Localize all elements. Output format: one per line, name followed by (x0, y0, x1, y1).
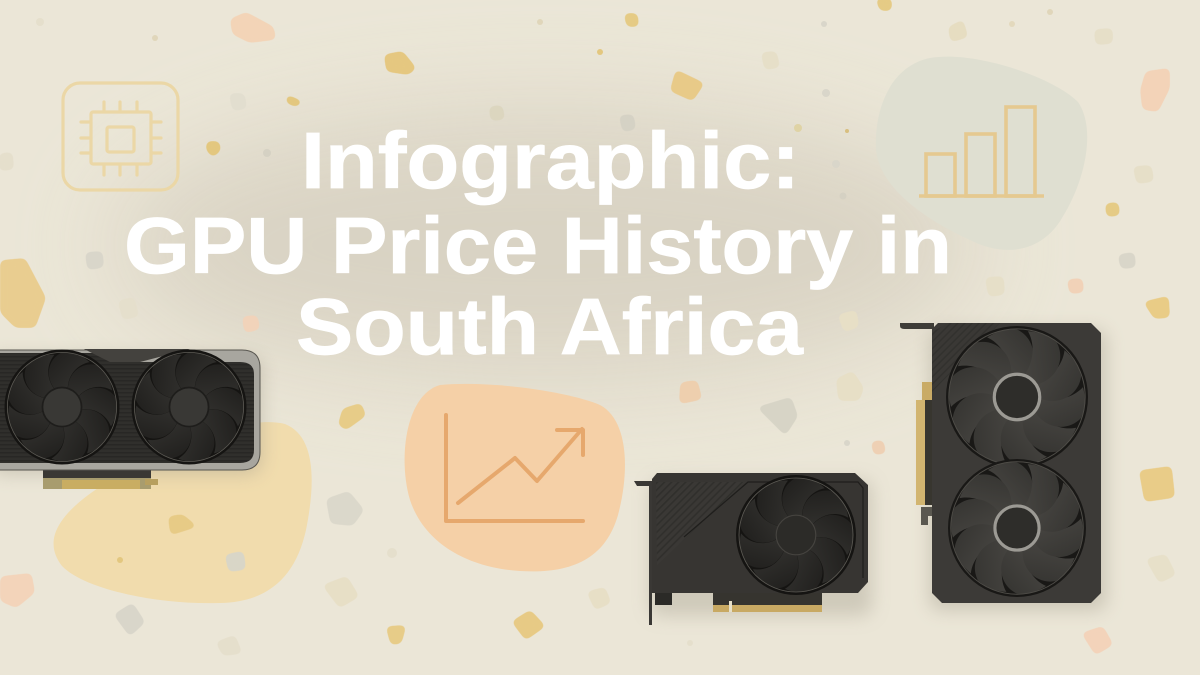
bracket (900, 323, 934, 329)
title: South Africa (296, 282, 804, 371)
title: Infographic: (301, 116, 800, 205)
icon: rising line chart (446, 415, 583, 521)
card shadow (930, 330, 1106, 610)
blob: orange backdrop (405, 384, 625, 571)
dark shroud (0, 353, 254, 463)
fan top (944, 325, 1090, 469)
bracket (634, 481, 652, 625)
pcie connector (713, 593, 822, 612)
graphics card: dual fan horizontal (0, 347, 262, 489)
title (124, 116, 952, 371)
fan bottom (946, 458, 1088, 598)
pcie connector (916, 382, 933, 505)
title haze (115, 110, 975, 380)
body (652, 473, 868, 593)
silver frame (0, 350, 260, 470)
terrazzo dots (36, 9, 1053, 646)
card shadow (0, 356, 262, 474)
graphics card: single fan (634, 473, 872, 625)
blob: gold backdrop (54, 422, 312, 603)
card shadow (650, 480, 872, 616)
fan (732, 473, 857, 598)
hook (921, 507, 933, 525)
fan left (1, 347, 121, 468)
pcie connector (43, 470, 158, 489)
icon: microchip (63, 83, 178, 190)
blob: grey backdrop (876, 57, 1087, 250)
title: GPU Price History in (124, 201, 952, 290)
graphics card: vertical dual fan (900, 323, 1106, 610)
fan right (128, 347, 248, 468)
icon: bar chart (919, 107, 1044, 196)
body (932, 323, 1101, 603)
